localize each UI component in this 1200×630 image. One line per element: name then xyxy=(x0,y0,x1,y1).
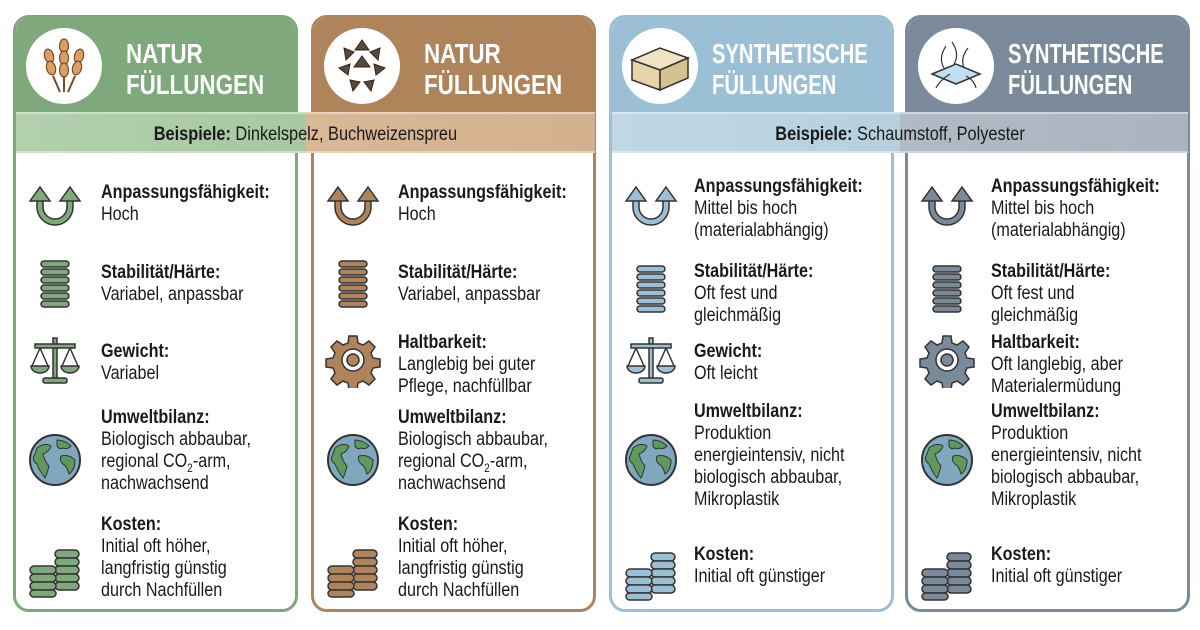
text: Umwelt 3 xyxy=(694,401,845,510)
text: Umwelt 1 xyxy=(101,407,251,494)
text: Kosten 1: langfristig günstig xyxy=(101,558,227,579)
text: Stabilität 3: Oft fest und xyxy=(694,283,777,304)
text: Anpassung 3 xyxy=(694,176,863,241)
text: Anpassung 4 xyxy=(991,176,1195,242)
text: Haltbarkeit 2: Haltbarkeit: xyxy=(398,332,487,353)
text: Kosten 1: durch Nachfüllen xyxy=(101,580,222,601)
text: Kosten 2: langfristig günstig xyxy=(398,558,524,579)
text: Umwelt 3: biologisch abbaubar, xyxy=(694,467,842,488)
text: Umwelt 1: nachwachsend xyxy=(101,473,209,494)
text: Stabilität 1: Stabilität/Härte: xyxy=(101,262,220,283)
text: Umwelt 1: regional CO2-arm, xyxy=(101,451,231,475)
heading: FÜLLUNGEN xyxy=(424,69,562,100)
text: Stabilität 4: Oft fest und xyxy=(991,283,1074,304)
text: Anpassung 1: Anpassungsfähigkeit: xyxy=(101,182,270,203)
text: Umwelt 4: biologisch abbaubar, xyxy=(991,467,1139,488)
text: Umwelt 3: energieintensiv, nicht xyxy=(694,445,845,466)
card 2 items xyxy=(325,186,381,598)
text: Anpassung 2 xyxy=(398,182,567,225)
text: Stabilität 2 xyxy=(398,262,540,305)
text: Umwelt 2: regional CO2-arm, xyxy=(398,451,528,475)
icon: spring xyxy=(636,265,666,313)
text: Haltbarkeit 2: Langlebig bei guter xyxy=(398,354,535,375)
text: Umwelt 4 xyxy=(991,401,1195,511)
text: Umwelt 2 xyxy=(398,407,548,494)
banner: Beispiele synthetisch xyxy=(612,112,1188,153)
text: Stabilität 1 xyxy=(101,262,244,305)
card 2: Natur Füllungen (Buchweizen) xyxy=(311,15,596,612)
banner: Beispiele synthetisch: Beispiele: Schaumstoff, Polyester xyxy=(775,124,1025,145)
text: Stabilität 4: Stabilität/Härte: xyxy=(991,261,1110,282)
text: Kosten 3 xyxy=(694,544,825,587)
icon: arrow xyxy=(920,186,974,226)
icon: arrow xyxy=(624,186,678,226)
text: Umwelt 2: nachwachsend xyxy=(398,473,506,494)
text: Kosten 4: Kosten: xyxy=(991,544,1051,565)
text: Anpassung 1: Hoch xyxy=(101,204,139,225)
text: Anpassung 4: Anpassungsfähigkeit: xyxy=(991,176,1160,197)
icon: gear xyxy=(325,335,381,388)
text: Kosten 1: Initial oft höher, xyxy=(101,536,211,557)
text: Gewicht 1: Variabel xyxy=(101,363,159,384)
heading: FÜLLUNGEN xyxy=(712,69,836,100)
icon: globe xyxy=(625,434,677,486)
text: Stabilität 3: Stabilität/Härte: xyxy=(694,261,813,282)
text: Haltbarkeit 2 xyxy=(398,332,536,397)
text: Anpassung 1 xyxy=(101,182,270,225)
banner: Beispiele natur xyxy=(16,112,595,153)
text: Umwelt 2: Umweltbilanz: xyxy=(398,407,507,428)
text: Anpassung 4: Mittel bis hoch xyxy=(991,198,1094,219)
text: Umwelt 1: Biologisch abbaubar, xyxy=(101,429,251,450)
card 4 items xyxy=(919,186,975,601)
icon: scale xyxy=(30,337,80,384)
text: Stabilität 2: Variabel, anpassbar xyxy=(398,284,540,305)
card 1 items xyxy=(28,186,82,598)
text: Gewicht 3 xyxy=(694,341,762,384)
text: Kosten 2: Kosten: xyxy=(398,514,458,535)
card 3: Synthetische Füllungen (Schaum) xyxy=(609,15,894,612)
text: Haltbarkeit 4: Haltbarkeit: xyxy=(991,332,1080,353)
text: Kosten 2 xyxy=(398,514,524,601)
text: Stabilität 3: gleichmäßig xyxy=(694,305,781,326)
text: Kosten 2: durch Nachfüllen xyxy=(398,580,519,601)
text: Stabilität 2: Stabilität/Härte: xyxy=(398,262,517,283)
card 1: Natur Füllungen (Dinkel) xyxy=(13,15,298,612)
text: Haltbarkeit 4: Materialermüdung xyxy=(991,376,1121,397)
heading xyxy=(126,38,264,100)
icon: coins xyxy=(625,552,676,601)
icon: globe xyxy=(327,434,379,486)
icon: scale xyxy=(626,337,676,384)
header 1 xyxy=(16,18,295,118)
heading: FÜLLUNGEN xyxy=(126,69,264,100)
heading: FÜLLUNGEN xyxy=(1008,69,1132,100)
text: Umwelt 2: Biologisch abbaubar, xyxy=(398,429,548,450)
text: Haltbarkeit 4 xyxy=(991,332,1195,398)
text: Stabilität 4 xyxy=(991,261,1195,327)
text: Stabilität 4: gleichmäßig xyxy=(991,305,1078,326)
icon: gear xyxy=(919,332,975,388)
text: Umwelt 4: Umweltbilanz: xyxy=(991,401,1100,422)
text: Umwelt 1: Umweltbilanz: xyxy=(101,407,210,428)
icon: coins xyxy=(327,549,378,598)
card 4: Synthetische Füllungen (Polyester) xyxy=(905,15,1190,612)
heading xyxy=(1008,38,1164,100)
heading: NATUR xyxy=(424,38,501,69)
text: Gewicht 3: Oft leicht xyxy=(694,363,758,384)
text: Umwelt 3: Umweltbilanz: xyxy=(694,401,803,422)
icon: polyester fibers xyxy=(918,28,994,104)
text: Umwelt 3: Mikroplastik xyxy=(694,489,779,510)
text: Stabilität 3 xyxy=(694,261,813,326)
text: Stabilität 1: Variabel, anpassbar xyxy=(101,284,243,305)
header 4 xyxy=(908,18,1187,118)
heading: SYNTHETISCHE xyxy=(712,38,868,69)
heading: SYNTHETISCHE xyxy=(1008,38,1164,69)
header 2 xyxy=(314,18,593,118)
icon: arrow xyxy=(326,186,380,226)
text: Haltbarkeit 2: Pflege, nachfüllbar xyxy=(398,376,532,397)
text: Anpassung 3: Anpassungsfähigkeit: xyxy=(694,176,863,197)
icon: foam block xyxy=(622,28,698,104)
text: Anpassung 3: (materialabhängig) xyxy=(694,220,829,241)
text: Kosten 4 xyxy=(991,544,1195,588)
icon: spring xyxy=(338,260,368,308)
icon: buckwheat xyxy=(324,28,400,104)
text: Anpassung 3: Mittel bis hoch xyxy=(694,198,797,219)
icon: globe xyxy=(919,432,975,488)
text: Umwelt 3: Produktion xyxy=(694,423,771,444)
text: Umwelt 4: Produktion xyxy=(991,423,1068,444)
text: Gewicht 1 xyxy=(101,341,169,384)
heading: NATUR xyxy=(126,38,203,69)
text: Gewicht 1: Gewicht: xyxy=(101,341,169,362)
banner: Beispiele natur: Beispiele: Dinkelspelz, Buchweizenspreu xyxy=(154,124,457,145)
text: Kosten 1 xyxy=(101,514,227,601)
heading xyxy=(424,38,562,100)
text: Anpassung 2: Anpassungsfähigkeit: xyxy=(398,182,567,203)
header 3 xyxy=(612,18,891,118)
icon: arrow xyxy=(28,186,82,226)
icon: coins xyxy=(919,545,975,601)
icon: globe xyxy=(29,434,81,486)
text: Anpassung 4: (materialabhängig) xyxy=(991,220,1126,241)
icon: spring xyxy=(932,265,962,313)
text: Umwelt 4: energieintensiv, nicht xyxy=(991,445,1142,466)
icon: wheat xyxy=(26,28,102,104)
text: Haltbarkeit 4: Oft langlebig, aber xyxy=(991,354,1123,375)
text: Kosten 2: Initial oft höher, xyxy=(398,536,508,557)
text: Kosten 1: Kosten: xyxy=(101,514,161,535)
heading xyxy=(712,38,868,100)
text: Gewicht 3: Gewicht: xyxy=(694,341,762,362)
text: Kosten 3: Kosten: xyxy=(694,544,754,565)
card 3 items xyxy=(624,186,678,601)
icon: spring xyxy=(40,260,70,308)
icon: coins xyxy=(29,549,80,598)
text: Kosten 3: Initial oft günstiger xyxy=(694,566,825,587)
text: Kosten 4: Initial oft günstiger xyxy=(991,566,1122,587)
text: Anpassung 2: Hoch xyxy=(398,204,436,225)
text: Umwelt 4: Mikroplastik xyxy=(991,489,1076,510)
